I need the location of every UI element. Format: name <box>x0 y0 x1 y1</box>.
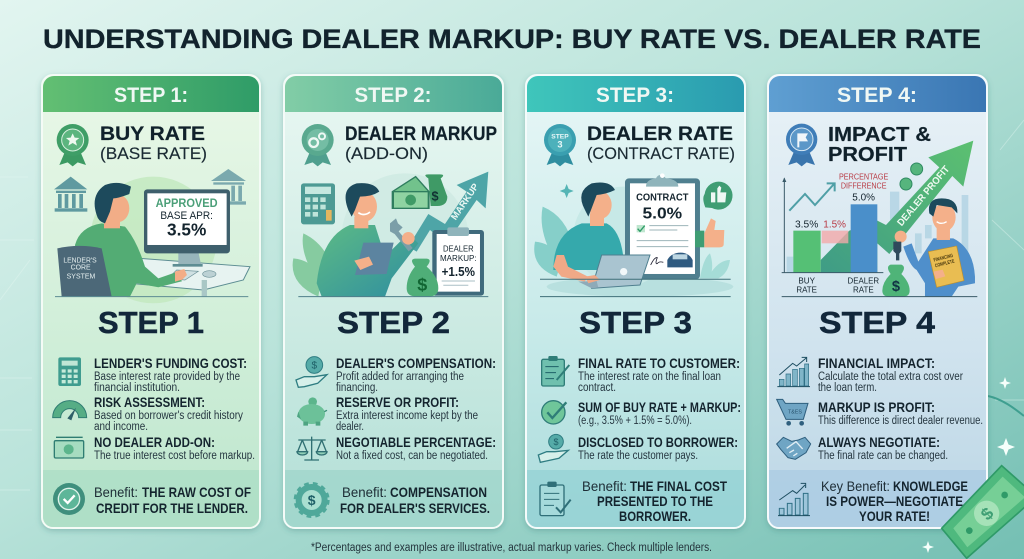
item: funding cost <box>94 355 247 394</box>
icon: step 3 ribbon <box>544 124 576 166</box>
item: reserve: dealer. <box>336 421 364 433</box>
icon: award ribbon <box>57 124 89 166</box>
header: step 4: STEP 4: <box>837 84 917 107</box>
item: financial impact <box>818 355 963 394</box>
chart labels: 5.0% <box>852 193 875 204</box>
subtitle: dealer rate: (CONTRACT RATE) <box>587 144 735 163</box>
item: risk assessment: Based on borrower's credit history <box>94 410 243 422</box>
clipboard: DEALER <box>443 245 474 254</box>
step label: step 2: STEP 2 <box>337 305 450 340</box>
panel: step 4 <box>768 75 987 528</box>
sparkles <box>922 377 1015 553</box>
money: $ <box>431 190 439 204</box>
icon: handshake <box>777 437 811 459</box>
item: funding cost: LENDER'S FUNDING COST: <box>94 355 247 371</box>
benefit: step 4: Key Benefit: <box>821 478 890 494</box>
clipboard: CONTRACT <box>636 193 688 204</box>
item: compensation: Profit added for arranging the <box>336 371 464 383</box>
icon: gauge <box>53 401 87 420</box>
icon: clipboard check <box>540 482 571 516</box>
arrow: dealer profit: DEALER PROFIT <box>896 164 952 229</box>
item: markup is profit: This difference is direct dealer revenue. <box>818 415 983 427</box>
item: compensation <box>336 355 496 394</box>
item: risk assessment: RISK ASSESSMENT: <box>94 394 205 410</box>
chart labels: RATE <box>796 286 817 295</box>
chart labels <box>795 172 888 295</box>
icon: coin in hand: $ <box>312 361 318 372</box>
item: disclosed: DISCLOSED TO BORROWER: <box>578 434 738 450</box>
benefit: step 2 <box>340 484 490 516</box>
chart labels: 3.5% <box>795 219 819 230</box>
person <box>553 182 623 282</box>
arrow: dealer profit <box>821 141 973 273</box>
item: sum: SUM OF BUY RATE + MARKUP: <box>578 399 741 415</box>
benefit: step 3: THE FINAL COST <box>630 478 727 494</box>
icon: banknote <box>942 466 1024 558</box>
item: markup is profit <box>818 399 983 427</box>
benefit: step 4: YOUR RATE! <box>859 508 930 524</box>
arrow: markup <box>408 172 488 252</box>
clipboard: +1.5% <box>442 265 475 279</box>
subtitle: impact and profit: IMPACT & <box>828 124 931 146</box>
icon: gear dollar <box>295 484 328 516</box>
chair: LENDER'S <box>63 258 97 265</box>
folder: FINANCING <box>933 253 954 264</box>
header: step 3: STEP 3: <box>596 84 674 107</box>
tablet <box>355 243 394 275</box>
icon: gear ribbon <box>302 124 334 166</box>
item: disclosed <box>578 434 738 462</box>
icon: coin in hand <box>538 434 568 462</box>
money bag <box>407 259 438 297</box>
benefit: step 3: PRESENTED TO THE <box>597 493 713 509</box>
item: final rate: FINAL RATE TO CUSTOMER: <box>578 355 740 371</box>
subtitle: dealer markup <box>345 124 497 163</box>
benefit: step 4: IS POWER—NEGOTIATE <box>826 493 963 509</box>
header: step 1 <box>43 76 259 112</box>
money bag: $ <box>892 279 900 295</box>
item: always negotiate <box>818 434 948 462</box>
monitor: BASE APR: <box>160 210 213 222</box>
item: financial impact: FINANCIAL IMPACT: <box>818 355 935 371</box>
chart labels: 1.5% <box>823 219 846 230</box>
keys <box>893 242 901 260</box>
header: step 4 <box>769 76 986 112</box>
chart labels: DEALER <box>847 276 879 285</box>
item: negotiable <box>336 434 496 462</box>
thumb <box>695 182 733 247</box>
footnote: *Percentages and examples are illustrative, actual markup varies. Check multiple lenders. <box>311 542 712 554</box>
benefit: step 1: Benefit: <box>94 484 138 500</box>
item: markup is profit: MARKUP IS PROFIT: <box>818 399 935 415</box>
money <box>392 174 447 208</box>
folder <box>928 246 964 287</box>
benefit: step 2: FOR DEALER'S SERVICES. <box>340 500 490 516</box>
item: final rate: contract. <box>578 382 616 394</box>
panel: step 1 <box>42 75 260 528</box>
subtitle: impact and profit <box>828 124 931 166</box>
folder: COMPLETE <box>934 258 956 269</box>
item: compensation: financing. <box>336 382 378 394</box>
benefit: step 4: KNOWLEDGE <box>893 478 968 494</box>
icon: gear dollar: $ <box>308 492 316 508</box>
list: step 3 points <box>538 355 741 462</box>
chart labels: PERCENTAGE <box>839 172 888 181</box>
benefit band <box>769 470 986 527</box>
item: final rate: The interest rate on the final loan <box>578 371 721 383</box>
icon: check circle <box>542 401 566 424</box>
subtitle: dealer rate: DEALER RATE <box>587 124 733 145</box>
icon: check seal <box>53 483 85 515</box>
person <box>75 183 187 297</box>
money bag: $ <box>417 275 427 295</box>
clipboard <box>432 227 484 296</box>
item: risk assessment <box>94 394 243 433</box>
laptop <box>578 255 650 288</box>
person <box>895 198 975 297</box>
icon: cart <box>777 399 808 426</box>
item: reserve: Extra interest income kept by the <box>336 410 478 422</box>
subtitle: buy rate: BUY RATE <box>100 124 205 145</box>
illustration: customer signing contract <box>534 173 733 297</box>
item: reserve: RESERVE OR PROFIT: <box>336 394 459 410</box>
benefit band <box>285 470 502 527</box>
list: step 4 points <box>777 355 983 462</box>
item: funding cost: financial institution. <box>94 382 180 394</box>
icon: cash <box>54 437 84 458</box>
clipboard: MARKUP: <box>440 254 477 263</box>
chair: SYSTEM <box>67 273 96 280</box>
item: reserve <box>336 394 478 433</box>
header: step 2 <box>285 76 502 112</box>
benefit band <box>43 470 259 527</box>
header: step 1: STEP 1: <box>114 84 188 107</box>
illustration: impact chart <box>782 141 977 297</box>
benefit: step 3: Benefit: <box>582 478 627 494</box>
trend line <box>789 183 835 211</box>
icon: coin in hand <box>296 357 327 387</box>
icon: scales <box>297 437 327 460</box>
item: funding cost: Base interest rate provided by the <box>94 371 240 383</box>
icon: flag ribbon <box>786 124 817 166</box>
icon: piggy bank <box>297 397 327 426</box>
item: negotiable: Not a fixed cost, can be negotiated. <box>336 450 488 462</box>
item: no add-on: NO DEALER ADD-ON: <box>94 434 215 450</box>
item: negotiable: NEGOTIABLE PERCENTAGE: <box>336 434 496 450</box>
step label: step 1: STEP 1 <box>98 305 204 340</box>
icon: calculator <box>58 357 81 386</box>
wrench <box>390 218 413 251</box>
item: compensation: DEALER'S COMPENSATION: <box>336 355 496 371</box>
item: final rate <box>578 355 740 394</box>
step label: step 4: STEP 4 <box>819 305 936 340</box>
subtitle: buy rate: (BASE RATE) <box>100 144 207 163</box>
coins <box>900 163 923 190</box>
icon: benefit chart <box>778 483 810 516</box>
benefit: step 1: THE RAW COST OF <box>142 484 251 500</box>
clipboard <box>625 173 700 279</box>
benefit band <box>527 470 744 527</box>
item: no add-on: The true interest cost before markup. <box>94 450 255 462</box>
benefit: step 1 <box>94 484 251 516</box>
icon: bank left <box>54 177 87 212</box>
chair: CORE <box>71 265 91 272</box>
illustration: dealer with markup arrow <box>293 172 488 300</box>
benefit: step 3: BORROWER. <box>619 508 691 524</box>
icon: cart: T&ES <box>788 409 802 415</box>
item: risk assessment: and income. <box>94 421 148 433</box>
arrow: markup: MARKUP <box>449 182 481 222</box>
chart labels: DIFFERENCE <box>841 181 886 190</box>
clipboard: 5.0% <box>642 205 683 222</box>
person <box>317 183 418 297</box>
icon: coin in hand: $ <box>553 437 558 447</box>
benefit: step 1: CREDIT FOR THE LENDER. <box>96 500 248 516</box>
item: sum: (e.g., 3.5% + 1.5% = 5.0%). <box>578 415 692 427</box>
panel: step 2 <box>284 75 503 528</box>
icon: step 3 ribbon: STEP <box>551 133 569 140</box>
header: step 3 <box>527 76 744 112</box>
benefit: step 2: Benefit: <box>342 484 387 500</box>
list: step 1 points <box>53 355 255 462</box>
item: always negotiate: ALWAYS NEGOTIATE: <box>818 434 940 450</box>
monitor: APPROVED <box>156 196 218 210</box>
calculator <box>301 183 335 224</box>
item: no add-on <box>94 434 255 462</box>
benefit: step 4 <box>821 478 968 524</box>
panel: step 3 <box>526 75 745 528</box>
list: step 2 points <box>296 355 496 462</box>
item: disclosed: The rate the customer pays. <box>578 450 698 462</box>
item: sum <box>578 399 741 427</box>
icon: bank right <box>211 169 246 205</box>
subtitle: dealer rate <box>587 124 735 163</box>
illustration: lender at computer <box>54 169 250 303</box>
header: step 2: STEP 2: <box>354 84 432 107</box>
subtitle: impact and profit: PROFIT <box>828 144 907 166</box>
title: UNDERSTANDING DEALER MARKUP: BUY RATE VS. DEALER RATE <box>43 24 981 54</box>
item: financial impact: the loan term. <box>818 382 877 394</box>
icon: step 3 ribbon: 3 <box>557 139 563 149</box>
bars <box>793 204 877 273</box>
money bag <box>882 265 910 297</box>
item: always negotiate: The final rate can be changed. <box>818 450 948 462</box>
icon: growth chart <box>777 357 810 387</box>
icon: clipboard pen <box>542 356 569 386</box>
chair <box>57 246 112 297</box>
step label: step 3: STEP 3 <box>579 305 692 340</box>
chart labels: RATE <box>853 286 874 295</box>
icon: banknote: $ <box>977 503 998 524</box>
monitor <box>144 189 230 267</box>
benefit: step 3 <box>582 478 727 524</box>
chart labels: BUY <box>798 276 816 285</box>
subtitle: dealer markup: DEALER MARKUP <box>345 124 497 145</box>
item: financial impact: Calculate the total extra cost over <box>818 371 963 383</box>
subtitle: buy rate <box>100 124 207 163</box>
benefit: step 2: COMPENSATION <box>390 484 487 500</box>
monitor: 3.5% <box>167 220 206 240</box>
subtitle: dealer markup: (ADD-ON) <box>345 144 428 163</box>
